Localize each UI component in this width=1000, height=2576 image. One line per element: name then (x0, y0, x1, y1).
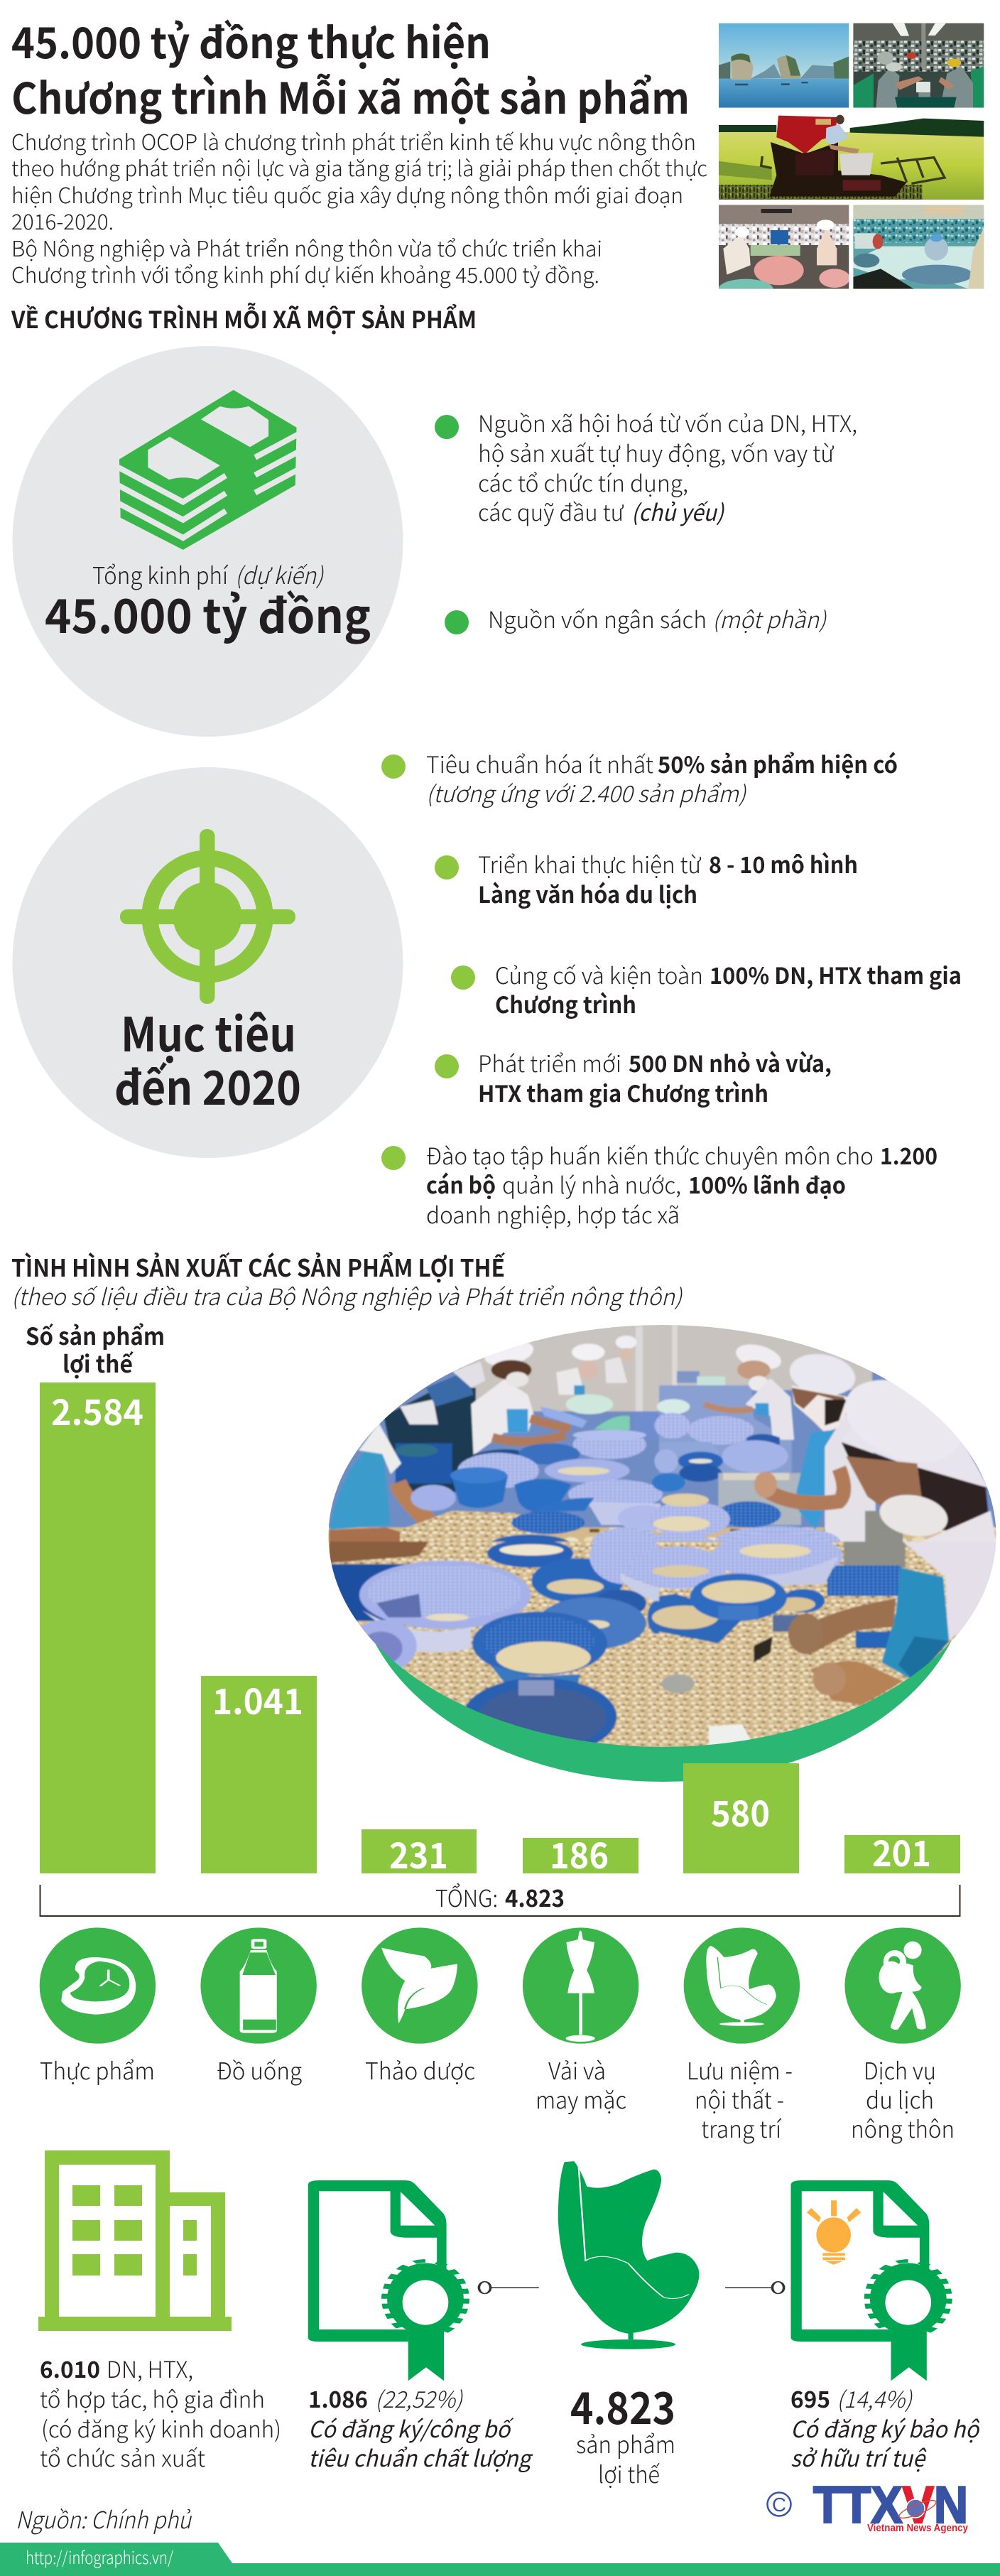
intro text block: Bộ Nông nghiệp và Phát triển nông thôn vừa tổ chức triển khai (11, 232, 602, 263)
bar: drinks: 1.041 (212, 1674, 303, 1725)
goal: new SMEs: HTX tham gia Chương trình (478, 1076, 768, 1109)
photo collage (719, 23, 984, 299)
text: production units: DN, HTX, (107, 2352, 193, 2385)
goal: new SMEs: 500 DN nhỏ và vừa, (629, 1046, 832, 1079)
title: Chương trình Mỗi xã một sản phẩm (11, 65, 690, 126)
connector right (725, 2282, 784, 2293)
category labels: du lịch (866, 2082, 934, 2116)
goal: standardise products: (tương ứng với 2.400 sản phẩm) (426, 776, 747, 809)
text: intellectual property (790, 2382, 981, 2474)
section heading: production of key products (11, 1249, 683, 1312)
photo: sea bay (719, 23, 849, 108)
top-left quadrant (328, 1325, 663, 1543)
bar: herbs (362, 1828, 477, 1879)
budget label (92, 557, 325, 591)
goal: consolidate enterprises: Củng cố và kiện toàn (495, 958, 703, 991)
title (11, 9, 690, 126)
funding source: socialised capital: hộ sản xuất tự huy động, vốn vay từ (478, 436, 834, 469)
goal: training: cán bộ (426, 1168, 496, 1201)
icon: food (40, 1927, 156, 2044)
budget label: (dự kiến) (235, 557, 325, 591)
intro text block: Chương trình với tổng kinh phí dự kiến khoảng 45.000 tỷ đồng. (11, 258, 599, 289)
category labels: nội thất - (695, 2082, 784, 2116)
green crescent behind photo (357, 1360, 969, 1782)
bar: souvenirs (683, 1763, 799, 1873)
goal: consolidate enterprises: 100% DN, HTX tham gia (710, 958, 962, 991)
text: total products: sản phẩm (576, 2426, 675, 2460)
icon: egg chair (558, 2161, 699, 2349)
title: 45.000 tỷ đồng thực hiện (11, 9, 491, 71)
goal: training (381, 1139, 938, 1230)
goal: training: Đào tạo tập huấn kiến thức chuyên môn cho (426, 1139, 874, 1171)
icon: building (38, 2150, 232, 2331)
bar: textiles: 186 (550, 1828, 609, 1879)
intro text block: hiện Chương trình Mục tiêu quốc gia xây dựng nông thôn mới giai đoạn (11, 178, 683, 210)
text: total products: lợi thế (598, 2456, 660, 2490)
intro text block: 2016-2020. (11, 205, 114, 236)
text: quality standards: (22,52%) (375, 2382, 464, 2415)
text: quality standards: tiêu chuẩn chất lượng (308, 2441, 533, 2474)
icon: hiker (844, 1927, 961, 2044)
intro text block (11, 125, 707, 289)
funding source: state budget: (một phần) (712, 602, 827, 635)
goal: training: quản lý nhà nước, (502, 1168, 681, 1201)
goal: training: 1.200 (880, 1139, 938, 1171)
budget value: 45.000 tỷ đồng (45, 579, 371, 647)
text: production units: 6.010 (40, 2352, 100, 2385)
bar: rural tourism: 201 (872, 1826, 931, 1877)
footer bar: http://infographics.vn/ (26, 2544, 173, 2569)
category icons (40, 1927, 961, 2044)
bar: souvenirs: 580 (711, 1786, 770, 1837)
chart caption: Số sản phẩm (26, 1318, 165, 1352)
funding source: socialised capital: các quỹ đầu tư (478, 495, 624, 528)
category labels: Vải và (548, 2052, 606, 2087)
panel: total budget circle (13, 346, 403, 737)
text: quality standards: Có đăng ký/công bố (308, 2412, 513, 2445)
panel: goals circle (13, 767, 403, 1158)
category labels: Thực phẩm (40, 2052, 155, 2087)
text: production units: tổ hợp tác, hộ gia đình (40, 2382, 265, 2415)
funding source: socialised capital: Nguồn xã hội hoá từ vốn của DN, HTX, (478, 406, 857, 439)
bar: rural tourism (844, 1826, 960, 1877)
photo: rice harvester (719, 112, 984, 200)
category labels: trang trí (701, 2111, 781, 2145)
logo: TTXVN: Vietnam News Agency (867, 2522, 969, 2534)
goal: new SMEs (435, 1046, 832, 1109)
goal: tourism villages: Triển khai thực hiện từ (478, 848, 701, 880)
funding source: socialised capital: (chủ yếu) (631, 495, 724, 528)
total bracket: TỔNG: (435, 1880, 498, 1914)
category labels (40, 2052, 955, 2145)
text: intellectual property: sở hữu trí tuệ (790, 2441, 927, 2474)
goals heading: đến 2020 (114, 1051, 301, 1119)
goal: consolidate enterprises: Chương trình (495, 987, 636, 1020)
icon: target (120, 829, 295, 1004)
section heading: production of key products: (theo số liệu điều tra của Bộ Nông nghiệp và Phát triển nông thôn) (11, 1279, 683, 1312)
goal: standardise products: 50% sản phẩm hiện có (658, 747, 898, 780)
photo: fish processing (719, 205, 849, 289)
intro text block: theo hướng phát triển nội lực và gia tăng giá trị; là giải pháp then chốt thực (11, 151, 707, 183)
text: production units (40, 2352, 281, 2474)
photo: garment factory (853, 205, 984, 289)
goal: standardise products: Tiêu chuẩn hóa ít nhất (426, 747, 653, 780)
logo: TTXVN: TTXVN (813, 2477, 968, 2534)
source: Nguồn: Chính phủ (16, 2501, 192, 2536)
total bracket: 4.823 (505, 1880, 565, 1914)
connector left (479, 2282, 539, 2293)
photo: cashew workers (320, 1321, 1000, 1769)
goals heading (114, 997, 301, 1119)
text: intellectual property: 695 (790, 2382, 830, 2415)
category labels: nông thôn (851, 2111, 955, 2145)
total bracket (40, 1880, 960, 1916)
funding source: socialised capital (435, 406, 857, 528)
goal: tourism villages: 8 - 10 mô hình (709, 848, 858, 880)
funding source: socialised capital: các tổ chức tín dụng, (478, 466, 688, 499)
goals heading: Mục tiêu (121, 997, 296, 1066)
chart caption (26, 1318, 165, 1380)
goal: consolidate enterprises (451, 958, 962, 1020)
goal: new SMEs: Phát triển mới (478, 1046, 621, 1079)
text: quality standards (308, 2382, 533, 2474)
icon: certified document (308, 2180, 466, 2381)
icon: drinks (200, 1927, 317, 2044)
bottom-left quadrant (328, 1527, 661, 1747)
icon: egg chair (684, 1927, 800, 2044)
bar: herbs: 231 (389, 1828, 448, 1879)
logo: TTXVN: C (772, 2494, 786, 2516)
chart caption: lợi thế (62, 1346, 134, 1380)
bar: food (40, 1382, 156, 1873)
bar: textiles (523, 1828, 638, 1879)
goal: standardise products (381, 747, 898, 809)
funding source: state budget (445, 602, 827, 635)
certificates, chair and connectors (308, 2161, 948, 2381)
bottom-right quadrant (630, 1532, 996, 1747)
category labels: Đồ uống (217, 2052, 302, 2087)
text: production units: tổ chức sản xuất (40, 2441, 205, 2474)
icon: stack of money (115, 390, 300, 550)
text: quality standards: 1.086 (308, 2382, 368, 2415)
funding source: state budget: Nguồn vốn ngân sách (488, 602, 707, 635)
footer bar (0, 2543, 1000, 2576)
bar: food: 2.584 (51, 1385, 143, 1436)
icon: document with light bulb (791, 2180, 948, 2381)
goal: training: doanh nghiệp, hợp tác xã (426, 1198, 680, 1230)
category labels: Thảo dược (365, 2052, 475, 2087)
section heading: production of key products: TÌNH HÌNH SẢN XUẤT CÁC SẢN PHẨM LỢI THẾ (11, 1249, 505, 1284)
top-right quadrant (651, 1326, 996, 1543)
goal: tourism villages: Làng văn hóa du lịch (478, 877, 697, 910)
bar: drinks (201, 1674, 317, 1873)
icon: dress form (523, 1927, 638, 2044)
category labels: may mặc (536, 2082, 626, 2116)
goal: training: 100% lãnh đạo (688, 1168, 846, 1201)
text: intellectual property: (14,4%) (837, 2382, 913, 2415)
text: production units: (có đăng ký kinh doanh) (41, 2412, 281, 2445)
text: total products: 4.823 (570, 2373, 675, 2437)
goal: tourism villages (435, 848, 858, 910)
category labels: Lưu niệm - (687, 2052, 793, 2087)
category labels: Dịch vụ (864, 2052, 936, 2087)
section heading: about the programme: VỀ CHƯƠNG TRÌNH MỖI XÃ MỘT SẢN PHẨM (11, 301, 477, 335)
budget label: Tổng kinh phí (92, 557, 228, 591)
icon: herbs (362, 1927, 478, 2044)
bar chart (40, 1382, 960, 1879)
text: total products (570, 2373, 675, 2490)
photo: electronics factory (853, 23, 984, 108)
text: intellectual property: Có đăng ký bảo hộ (790, 2412, 981, 2445)
intro text block: Chương trình OCOP là chương trình phát triển kinh tế khu vực nông thôn (11, 125, 696, 156)
